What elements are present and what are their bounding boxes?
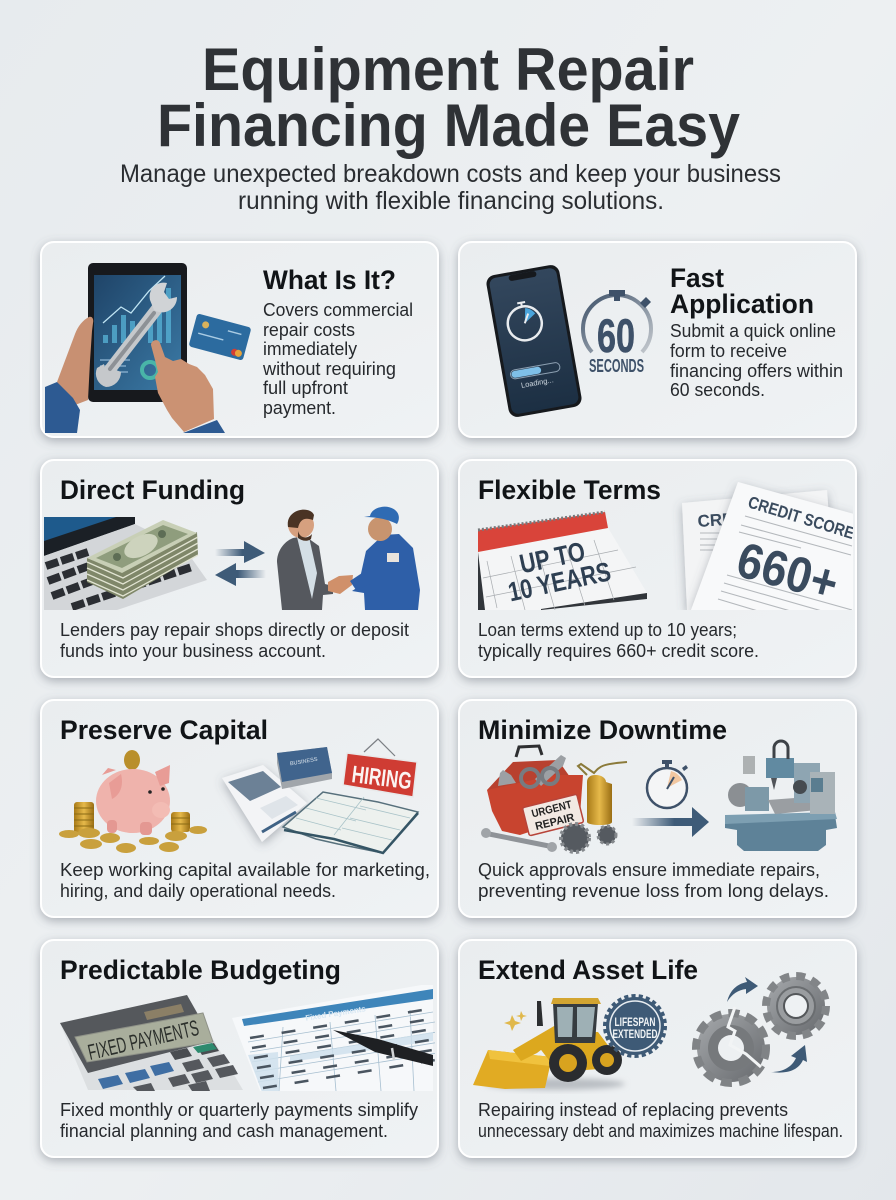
panel: direct funding — [41, 460, 438, 677]
icon: oil can — [578, 762, 627, 825]
panel: fast application: 60 seconds. — [670, 380, 765, 400]
icon: credit score papers: 660+ — [731, 532, 844, 612]
panel: fast application: Fast — [670, 263, 724, 293]
panel: predictable budgeting: Predictable Budgeting — [60, 955, 341, 985]
icon: left hand — [57, 317, 93, 405]
panel: fast application — [459, 242, 856, 437]
icon: calendar: UP TO — [517, 536, 588, 579]
subtitle: running with flexible financing solutions. — [238, 187, 664, 215]
icon: credit score papers: CRE — [697, 510, 734, 531]
icon: laptop with cash — [44, 517, 207, 610]
icon: stack of business cards — [277, 747, 332, 789]
icon: pen — [333, 1030, 433, 1066]
panel: predictable budgeting: financial planning and cash management. — [60, 1121, 388, 1141]
icon: calendar: 10 YEARS — [505, 556, 613, 607]
icon: stack of business cards: BUSINESS — [290, 757, 318, 767]
panel: preserve capital — [41, 700, 438, 917]
panel: what is it: without requiring — [262, 359, 396, 379]
panel: what is it: repair costs — [263, 320, 355, 340]
icon: credit card — [189, 313, 251, 361]
panel: fast application: form to receive — [670, 341, 787, 361]
icon: curved arrows — [727, 977, 807, 1073]
icon: handshake — [328, 575, 353, 594]
icon: phone: Loading... — [520, 375, 554, 390]
panel: what is it: immediately — [263, 339, 357, 359]
panel: what is it: payment. — [263, 398, 336, 418]
title: Financing Made Easy — [157, 92, 741, 159]
panel: predictable budgeting: Fixed monthly or quarterly payments simplify — [60, 1100, 418, 1120]
icon: open ledger — [283, 792, 418, 853]
icon: businessman — [277, 510, 333, 610]
icon: phone — [485, 264, 583, 418]
panel: flexible terms — [459, 460, 857, 677]
panel: flexible terms: Loan terms extend up to 10 years; — [478, 620, 737, 640]
icon: toolbox — [487, 746, 584, 836]
panel: extend asset life: unnecessary debt and maximizes machine lifespan. — [478, 1121, 843, 1141]
panel: flexible terms: Flexible Terms — [478, 475, 661, 505]
icon: lifespan extended badge: LIFESPAN — [614, 1015, 656, 1029]
panel: direct funding: Lenders pay repair shops directly or deposit — [60, 620, 409, 640]
panel: minimize downtime: Quick approvals ensure immediate repairs, — [478, 860, 820, 880]
icon: calculator: FIXED PAYMENTS — [86, 1015, 201, 1065]
icon: 60 seconds stopwatch: SECONDS — [589, 356, 644, 376]
panel: preserve capital: Keep working capital available for marketing, — [60, 860, 430, 880]
panel: preserve capital: hiring, and daily operational needs. — [60, 881, 336, 901]
panel: what is it: What Is It? — [263, 265, 396, 295]
icon: two way arrows — [215, 541, 266, 586]
panel: extend asset life: Extend Asset Life — [478, 955, 698, 985]
panel: minimize downtime: preventing revenue loss from long delays. — [478, 881, 829, 901]
icon: repaired gear — [766, 976, 826, 1036]
panel: predictable budgeting — [41, 940, 448, 1157]
icon: credit score papers: CREDIT SCORE — [746, 493, 857, 543]
icon: arrow to machine — [632, 807, 709, 837]
panel: direct funding: Direct Funding — [60, 475, 245, 505]
panel: fast application: Submit a quick online — [670, 321, 836, 341]
icon: spreadsheet — [232, 983, 448, 1092]
panel: fast application: Application — [670, 289, 814, 319]
panel: what is it: Covers commercial — [263, 300, 413, 320]
panel: preserve capital: Preserve Capital — [60, 715, 268, 745]
subtitle — [120, 160, 781, 215]
icon: toolbox: URGENT — [530, 799, 573, 820]
icon: wheel loader — [473, 998, 625, 1090]
icon: spreadsheet: Fixed Payments — [305, 1004, 367, 1023]
panel: extend asset life: Repairing instead of replacing prevents — [478, 1100, 788, 1120]
icon: 60 seconds stopwatch: 60 — [597, 309, 635, 362]
icon: 60 seconds stopwatch — [583, 290, 651, 376]
icon: calculator — [60, 995, 243, 1091]
icon: hiring sign: HIRING — [350, 761, 413, 795]
icon: calendar — [478, 512, 647, 610]
icon: hiring sign — [343, 739, 417, 797]
icon: wrench and gears — [481, 824, 616, 852]
icon: toolbox: REPAIR — [534, 812, 576, 833]
icon: lifespan extended badge — [606, 997, 664, 1055]
panel: minimize downtime: Minimize Downtime — [478, 715, 727, 745]
icon: broken gear — [696, 1007, 766, 1083]
panel: extend asset life — [459, 940, 856, 1157]
subtitle: Manage unexpected breakdown costs and keep your business — [120, 160, 781, 188]
panel: minimize downtime — [459, 700, 856, 917]
icon: credit score papers — [682, 482, 857, 614]
title: Equipment Repair — [202, 36, 694, 103]
panel: what is it — [41, 242, 438, 437]
icon: milling machine — [725, 741, 837, 851]
icon: tablet with wrench and hands — [45, 263, 251, 433]
icon: lifespan extended badge: EXTENDED — [612, 1027, 658, 1041]
panel: fast application: financing offers within — [670, 361, 843, 381]
panel: direct funding: funds into your business account. — [60, 641, 326, 661]
title — [157, 36, 741, 159]
panel: what is it: full upfront — [263, 378, 348, 398]
panel: flexible terms: typically requires 660+ credit score. — [478, 641, 759, 661]
icon: flyer — [222, 765, 307, 842]
icon: right hand — [151, 340, 214, 432]
icon: stopwatch — [647, 760, 688, 808]
icon: piggy bank with coins — [59, 750, 207, 853]
icon: mechanic — [350, 507, 420, 610]
